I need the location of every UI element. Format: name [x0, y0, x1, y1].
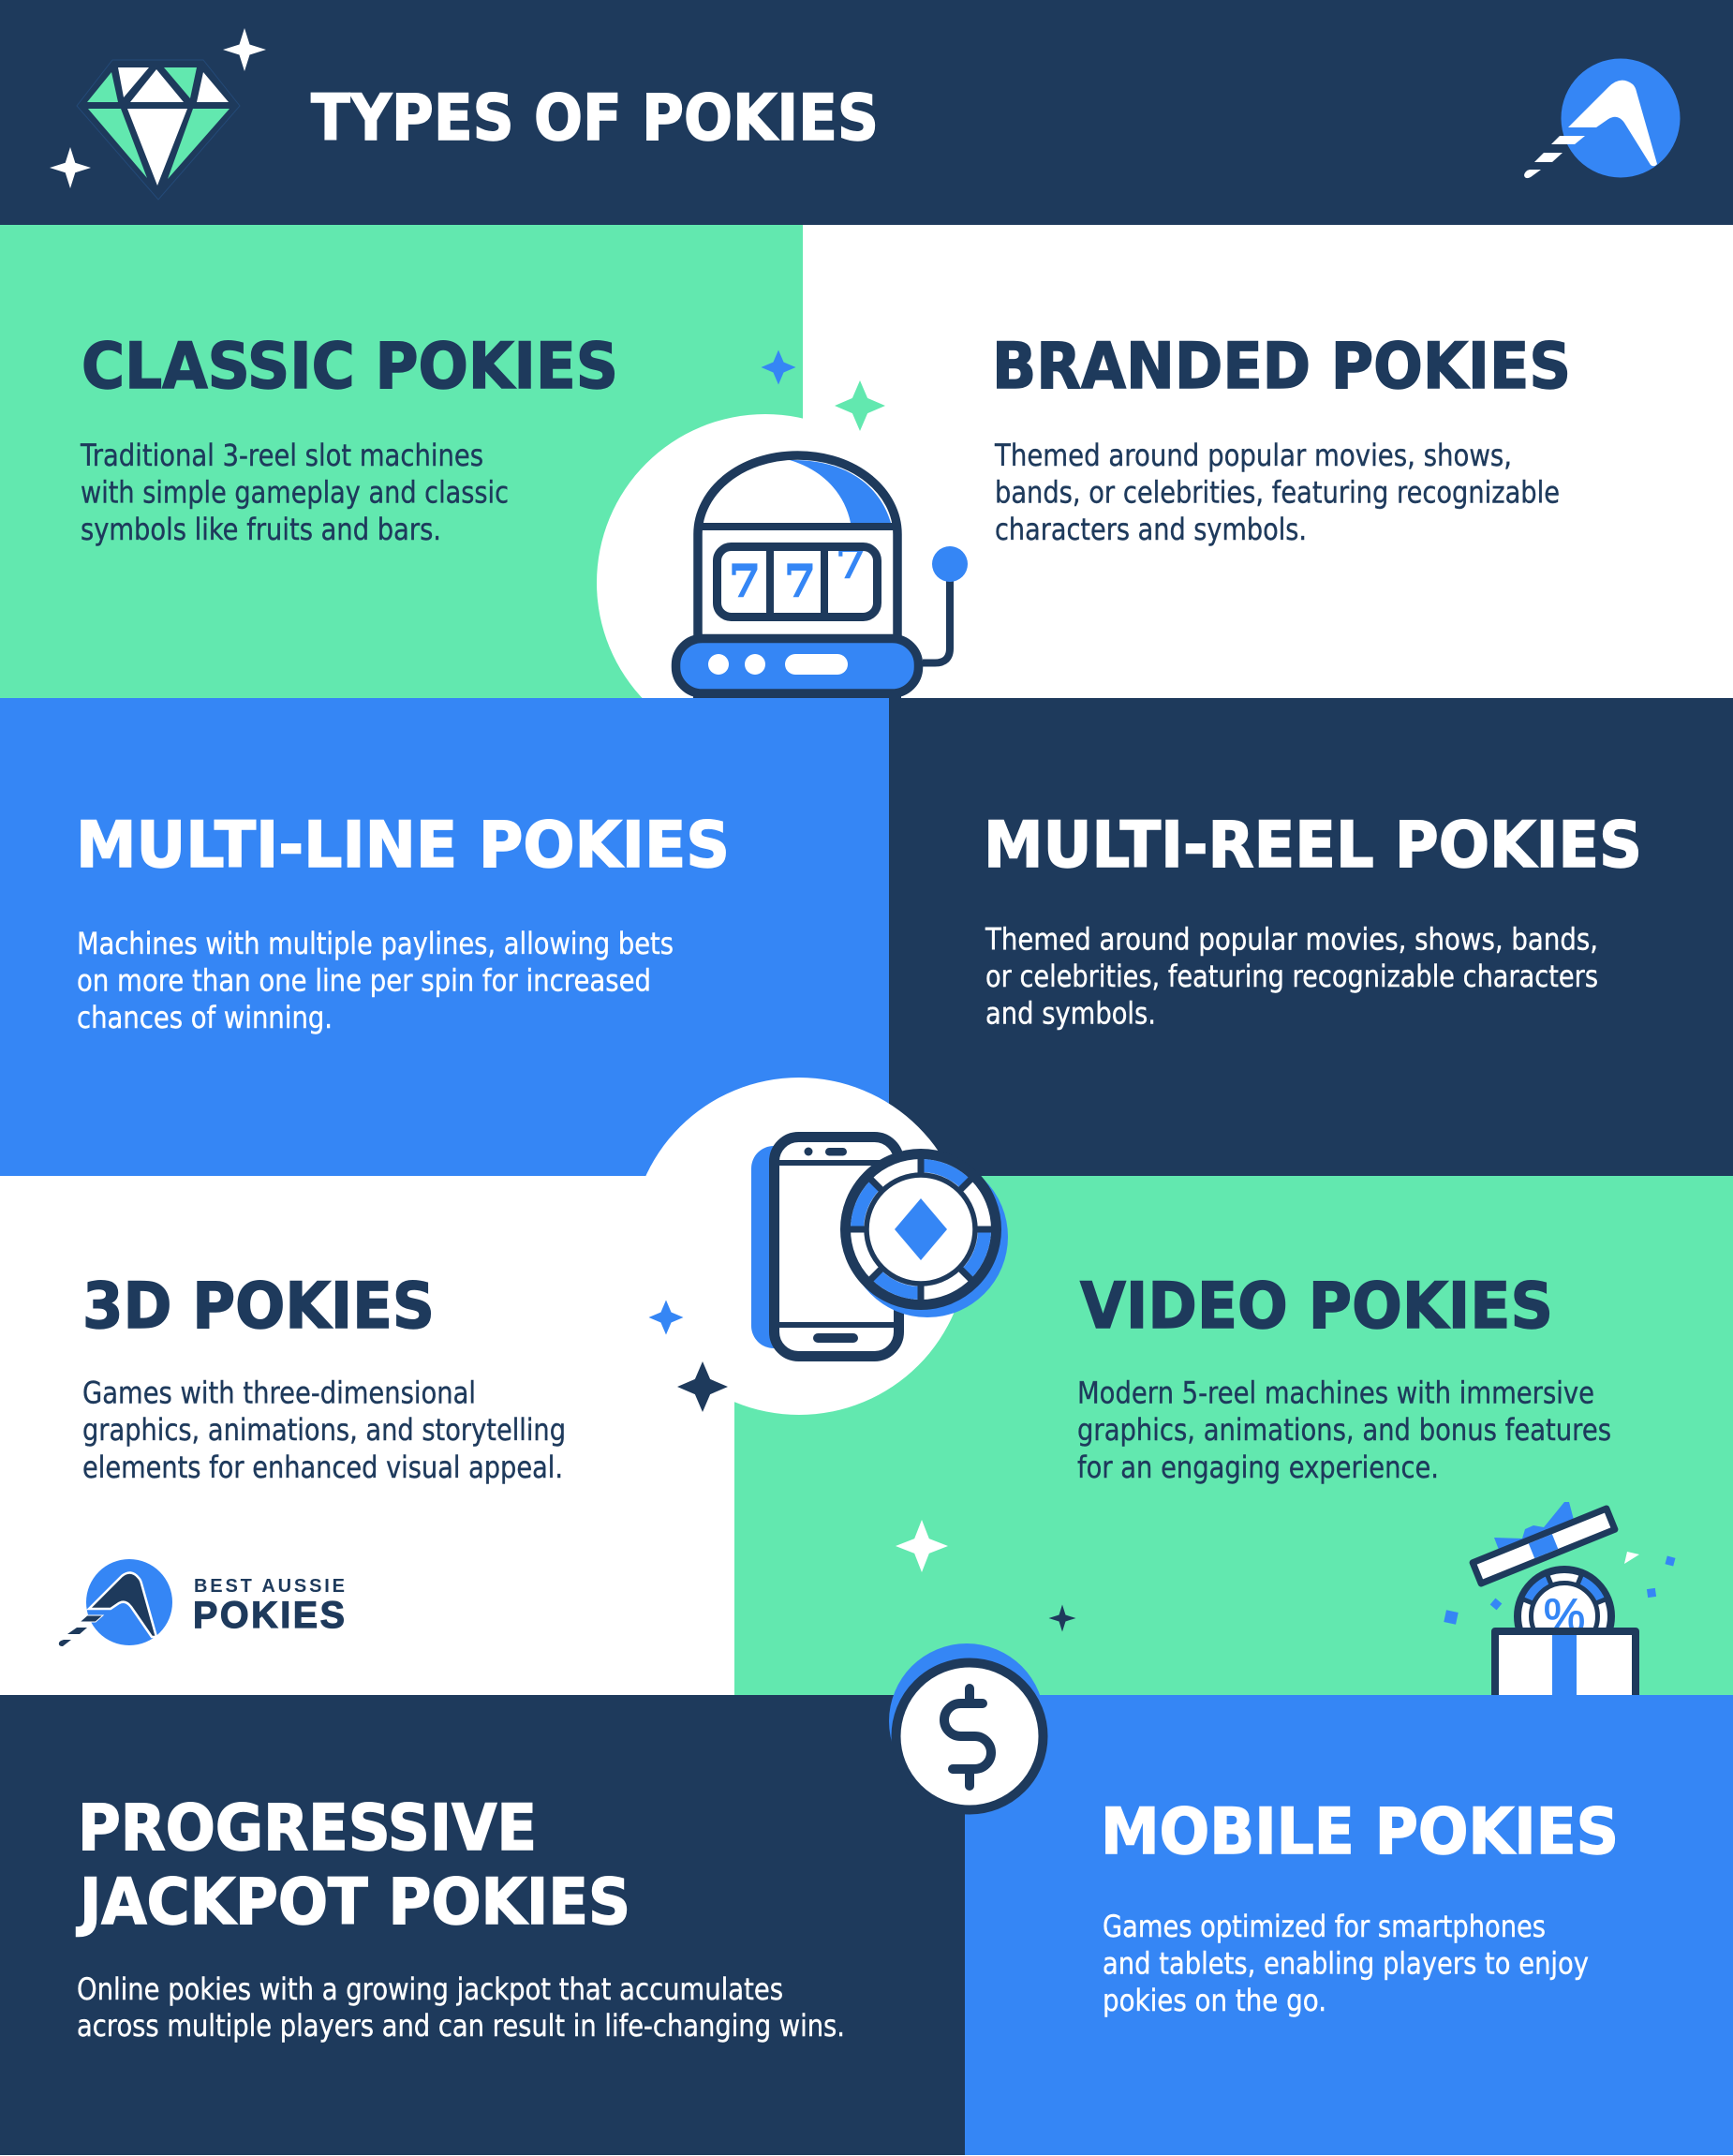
text: branded pokies description: Themed around popular movies, shows, — [994, 438, 1512, 473]
text: classic pokies description — [80, 438, 509, 547]
icon: blue sparkle near phone — [648, 1301, 684, 1334]
panel: branded pokies — [803, 225, 1733, 698]
panel: multi-reel pokies — [889, 698, 1733, 1176]
text: mobile pokies description: Games optimized for smartphones — [1103, 1909, 1546, 1944]
text: multi-reel pokies description: Themed around popular movies, shows, bands, — [985, 922, 1598, 958]
panel: mobile pokies — [965, 1695, 1733, 2155]
text: progressive jackpot description — [77, 1971, 845, 2044]
text: branded pokies description — [994, 438, 1560, 547]
text: multi-reel pokies description — [985, 922, 1598, 1031]
icon: green sparkle near slot machine — [835, 380, 885, 431]
panel: header — [0, 0, 1733, 225]
text: video pokies description — [1077, 1375, 1611, 1485]
text: 3d pokies description: elements for enhanced visual appeal. — [82, 1450, 563, 1485]
icon: navy sparkle near phone — [677, 1361, 728, 1412]
white circle behind phone — [630, 1078, 968, 1415]
percent symbol: % — [1544, 1589, 1585, 1642]
heading: progressive jackpot pokies: JACKPOT POKIES — [76, 1866, 630, 1940]
icon: dollar coin — [889, 1643, 1044, 1810]
text: classic pokies description: Traditional 3-reel slot machines — [80, 438, 483, 473]
text: mobile pokies description — [1103, 1909, 1589, 2018]
icon: header sparkle bottom — [50, 147, 91, 188]
text: mobile pokies description: and tablets, enabling players to enjoy — [1103, 1945, 1589, 1981]
title: TYPES OF POKIES — [311, 82, 879, 156]
icon: header sparkle top — [223, 28, 266, 71]
logo: best aussie pokies — [59, 1559, 345, 1646]
heading: progressive jackpot pokies — [76, 1792, 630, 1940]
heading: 3d pokies: 3D POKIES — [82, 1270, 435, 1344]
icon: gift box with chip — [1444, 1502, 1676, 1699]
text: progressive jackpot description: across multiple players and can result in life-changing wins. — [77, 2008, 845, 2044]
panel: video pokies — [734, 1176, 1733, 1695]
icon: slot machine — [676, 455, 968, 698]
text: video pokies description: graphics, animations, and bonus features — [1077, 1412, 1611, 1448]
text: video pokies description: for an engaging experience. — [1077, 1450, 1439, 1485]
heading: video pokies: VIDEO POKIES — [1080, 1270, 1553, 1344]
text: video pokies description: Modern 5-reel machines with immersive — [1077, 1375, 1594, 1411]
heading: multi-line pokies: MULTI-LINE POKIES — [76, 809, 730, 883]
reel sevens: 7 — [784, 556, 816, 608]
text: 3d pokies description: graphics, animations, and storytelling — [82, 1412, 566, 1448]
text: multi-reel pokies description: or celebrities, featuring recognizable characters — [985, 959, 1598, 994]
heading: multi-reel pokies: MULTI-REEL POKIES — [984, 809, 1642, 883]
text: 3d pokies description — [82, 1375, 566, 1485]
text: classic pokies description: with simple gameplay and classic — [81, 474, 509, 510]
text: mobile pokies description: pokies on the go. — [1103, 1983, 1326, 2018]
text: multi-reel pokies description: and symbols. — [985, 995, 1156, 1031]
panel: multi-line pokies — [0, 698, 889, 1176]
heading: mobile pokies: MOBILE POKIES — [1101, 1795, 1619, 1869]
text: classic pokies description: symbols like fruits and bars. — [81, 512, 441, 547]
icon: white sparkle — [896, 1520, 948, 1572]
text: multi-line pokies description — [77, 926, 674, 1035]
logo: best aussie pokies: POKIES — [193, 1595, 345, 1636]
reel sevens: 7 — [729, 556, 761, 608]
panel: 3d pokies — [0, 1176, 734, 1695]
text: multi-line pokies description: chances of winning. — [77, 1000, 333, 1035]
icon: blue sparkle near slot machine — [761, 350, 796, 384]
icon: phone with casino chip — [751, 1137, 1008, 1357]
heading: classic pokies: CLASSIC POKIES — [81, 330, 618, 404]
heading: progressive jackpot pokies: PROGRESSIVE — [78, 1792, 537, 1866]
text: branded pokies description: bands, or celebrities, featuring recognizable — [995, 474, 1560, 510]
text: multi-line pokies description: Machines with multiple paylines, allowing bets — [77, 926, 674, 961]
icon: small navy sparkle — [1049, 1604, 1075, 1632]
panel: classic pokies — [0, 225, 803, 698]
panel: progressive jackpot pokies — [0, 1695, 965, 2155]
text: branded pokies description: characters and symbols. — [995, 512, 1307, 547]
text: multi-line pokies description: on more than one line per spin for increased — [77, 963, 651, 999]
logo: best aussie pokies: BEST AUSSIE — [194, 1576, 345, 1597]
reel sevens: 7 — [836, 537, 866, 589]
icon: logo top right — [1524, 58, 1681, 178]
text: progressive jackpot description: Online pokies with a growing jackpot that accumulates — [77, 1971, 783, 2007]
text: 3d pokies description: Games with three-dimensional — [82, 1375, 476, 1411]
heading: branded pokies: BRANDED POKIES — [992, 330, 1571, 404]
reel sevens — [732, 551, 864, 598]
icon: diamond — [77, 60, 240, 200]
white circle behind slot machine — [597, 414, 934, 751]
